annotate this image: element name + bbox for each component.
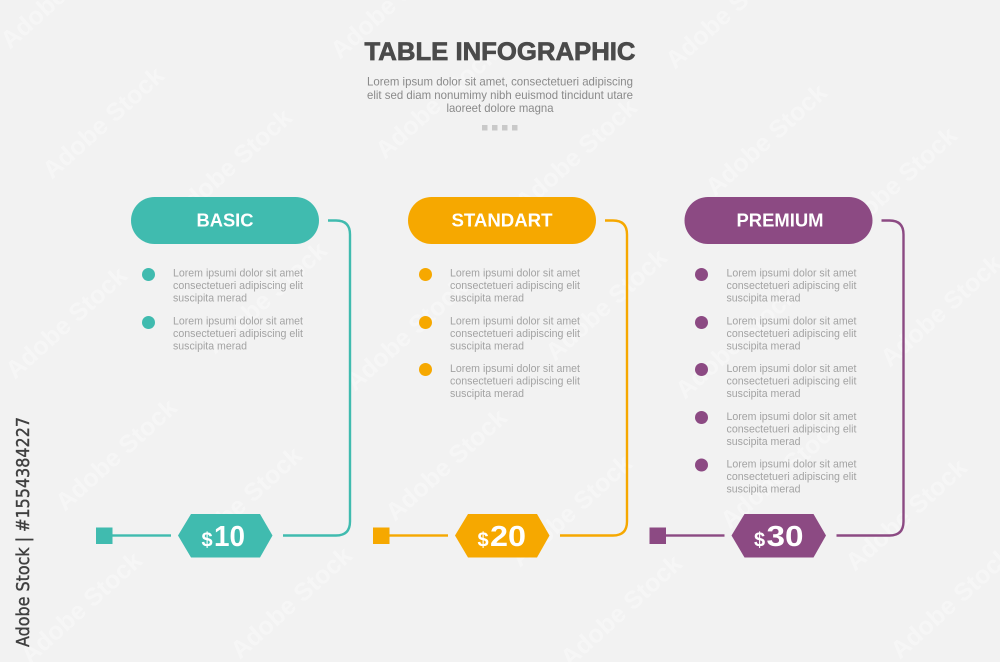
subtitle: Lorem ipsum dolor sit amet, consectetueri adipiscing — [367, 74, 633, 88]
connector: premium — [836, 220, 904, 536]
feature list: basic — [142, 268, 303, 352]
feature list: premium: suscipita merad — [726, 484, 800, 496]
watermark pattern: Adobe Stock — [510, 93, 643, 216]
feature list: premium: consectetueri adipiscing elit — [726, 423, 856, 435]
subtitle: elit sed diam nonumimy nibh euismod tincidunt utare — [367, 88, 633, 102]
watermark pattern: Adobe Stock — [0, 261, 133, 384]
subtitle: laoreet dolore magna — [446, 101, 554, 115]
header pill: standart — [408, 197, 596, 244]
price badge: premium: $ — [754, 530, 765, 552]
marker square: premium — [650, 528, 666, 544]
price badge: basic — [178, 514, 272, 558]
watermark pattern: Adobe Stock — [37, 61, 170, 184]
feature list: premium: consectetueri adipiscing elit — [726, 471, 856, 483]
feature list: premium — [695, 268, 856, 496]
watermark pattern: Adobe Stock — [340, 273, 473, 396]
header pill: basic — [131, 197, 319, 244]
watermark pattern: Adobe Stock — [175, 441, 308, 564]
panel: premium — [650, 197, 904, 558]
marker square: basic — [96, 528, 112, 544]
watermark pattern: Adobe Stock — [840, 453, 973, 576]
subtitle — [367, 74, 633, 115]
feature list: premium: Lorem ipsumi dolor sit amet — [726, 411, 856, 423]
leader line: standart — [389, 534, 448, 537]
feature list: premium: Lorem ipsumi dolor sit amet — [726, 315, 856, 327]
feature list: premium: Lorem ipsumi dolor sit amet — [726, 268, 856, 280]
feature list: standart: Lorem ipsumi dolor sit amet — [450, 363, 580, 375]
feature list: standart: consectetueri adipiscing elit — [450, 280, 580, 292]
connector: basic — [283, 220, 350, 536]
feature list: basic: consectetueri adipiscing elit — [173, 328, 303, 340]
price badge: standart: $ — [478, 530, 489, 552]
price badge: standart: 20 — [490, 521, 526, 553]
watermark pattern: Adobe Stock — [700, 78, 833, 201]
watermark pattern: Adobe Stock — [670, 281, 803, 404]
feature list: basic: Lorem ipsumi dolor sit amet — [173, 315, 303, 327]
feature list: basic: suscipita merad — [173, 340, 247, 352]
feature list: premium: consectetueri adipiscing elit — [726, 376, 856, 388]
feature list: premium: suscipita merad — [726, 292, 800, 304]
feature list: premium: Lorem ipsumi dolor sit amet — [726, 363, 856, 375]
leader line: premium — [666, 534, 724, 537]
connector: standart — [560, 220, 627, 536]
watermark pattern: Adobe Stock — [380, 403, 513, 526]
feature list: standart: consectetueri adipiscing elit — [450, 328, 580, 340]
feature list: premium: Lorem ipsumi dolor sit amet — [726, 458, 856, 470]
heading: standart: STANDART — [452, 210, 553, 230]
watermark pattern: Adobe Stock — [715, 411, 848, 534]
marker square: standart — [373, 528, 390, 544]
feature list: standart: Lorem ipsumi dolor sit amet — [450, 315, 580, 327]
leader line: basic — [112, 534, 171, 537]
feature list: basic: Lorem ipsumi dolor sit amet — [173, 268, 303, 280]
watermark pattern: Adobe Stock — [200, 236, 333, 359]
watermark pattern: Adobe Stock — [225, 541, 358, 662]
watermark pattern: Adobe Stock — [50, 393, 183, 516]
header pill: premium — [684, 197, 872, 244]
title decoration: four small squares — [482, 125, 518, 130]
feature list: standart: suscipita merad — [450, 340, 524, 352]
watermark pattern: Adobe Stock — [830, 121, 963, 244]
feature list: premium: suscipita merad — [726, 340, 800, 352]
feature list: standart: suscipita merad — [450, 388, 524, 400]
feature list: standart: Lorem ipsumi dolor sit amet — [450, 268, 580, 280]
price badge: premium — [732, 514, 826, 558]
watermark pattern: Adobe Stock — [540, 243, 673, 366]
watermark pattern: Adobe Stock — [165, 103, 298, 226]
price badge: basic: 10 — [214, 521, 245, 553]
feature list: standart: suscipita merad — [450, 292, 524, 304]
feature list: premium: consectetueri adipiscing elit — [726, 280, 856, 292]
heading: basic: BASIC — [196, 210, 254, 230]
panel: standart — [373, 197, 627, 558]
price badge: premium: 30 — [766, 521, 804, 553]
feature list: premium: suscipita merad — [726, 436, 800, 448]
panel: basic — [96, 197, 350, 558]
feature list: basic: consectetueri adipiscing elit — [173, 280, 303, 292]
feature list: premium: consectetueri adipiscing elit — [726, 328, 856, 340]
feature list: basic: suscipita merad — [173, 292, 247, 304]
watermark pattern: Adobe Stock — [505, 449, 638, 572]
watermark pattern: Adobe Stock — [370, 41, 503, 164]
title: TABLE INFOGRAPHIC — [364, 38, 636, 66]
heading: premium: PREMIUM — [736, 210, 824, 230]
feature list: premium: suscipita merad — [726, 388, 800, 400]
feature list: standart: consectetueri adipiscing elit — [450, 376, 580, 388]
price badge: standart — [455, 514, 550, 558]
stock id label: Adobe Stock | #1554384227 — [14, 417, 34, 647]
price badge: basic: $ — [202, 530, 213, 552]
feature list: standart — [419, 268, 580, 400]
